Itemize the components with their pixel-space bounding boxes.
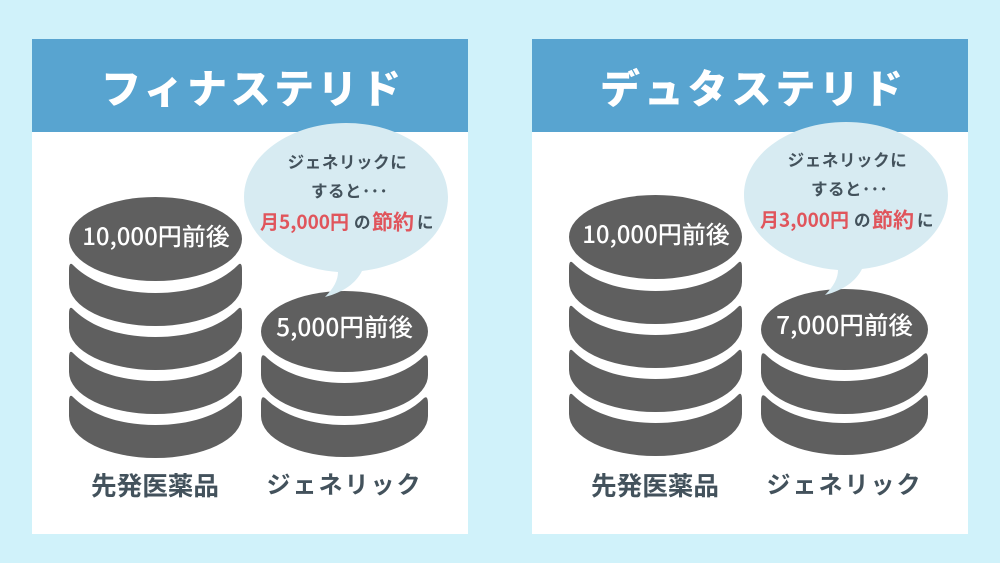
value: generic price: 7,000円前後 (776, 307, 913, 342)
bubble text: 節約 (372, 206, 414, 236)
value: brand-name price: 10,000円前後 (582, 215, 730, 250)
bubble text: 月3,000円 (760, 204, 849, 233)
bubble text (260, 149, 434, 236)
speech bubble: savings (744, 122, 948, 295)
header: dutasteride (532, 39, 968, 132)
chart: brand-name coin stack (569, 195, 742, 456)
bubble text: ジェネリックに (288, 149, 407, 173)
label: brand-name: 先発医薬品 (591, 466, 719, 503)
speech bubble: savings (244, 123, 448, 297)
chart: generic coin stack (261, 291, 428, 457)
bubble text: すると･･･ (311, 178, 388, 202)
bubble text: に (917, 207, 934, 231)
header: finasteride (32, 39, 468, 132)
bubble text: すると･･･ (811, 176, 888, 200)
label: brand-name: 先発医薬品 (91, 466, 219, 503)
bubble text: 月5,000円 (260, 206, 349, 235)
chart: generic coin stack (761, 289, 928, 455)
value: generic price: 5,000円前後 (276, 309, 413, 344)
label: generic: ジェネリック (266, 465, 422, 500)
title: dutasteride: デュタステリド (600, 57, 903, 115)
value: brand-name price: 10,000円前後 (82, 217, 230, 252)
panel: finasteride (32, 39, 468, 534)
panel: dutasteride (532, 39, 968, 534)
label: generic: ジェネリック (766, 465, 922, 500)
bubble text: ジェネリックに (788, 147, 907, 171)
bubble text: の (854, 207, 870, 231)
bubble text: 節約 (872, 204, 914, 234)
bubble text (760, 147, 934, 234)
title: finasteride: フィナステリド (101, 57, 401, 115)
bubble text: に (417, 209, 434, 233)
chart: brand-name coin stack (69, 197, 242, 458)
bubble text: の (354, 209, 370, 233)
